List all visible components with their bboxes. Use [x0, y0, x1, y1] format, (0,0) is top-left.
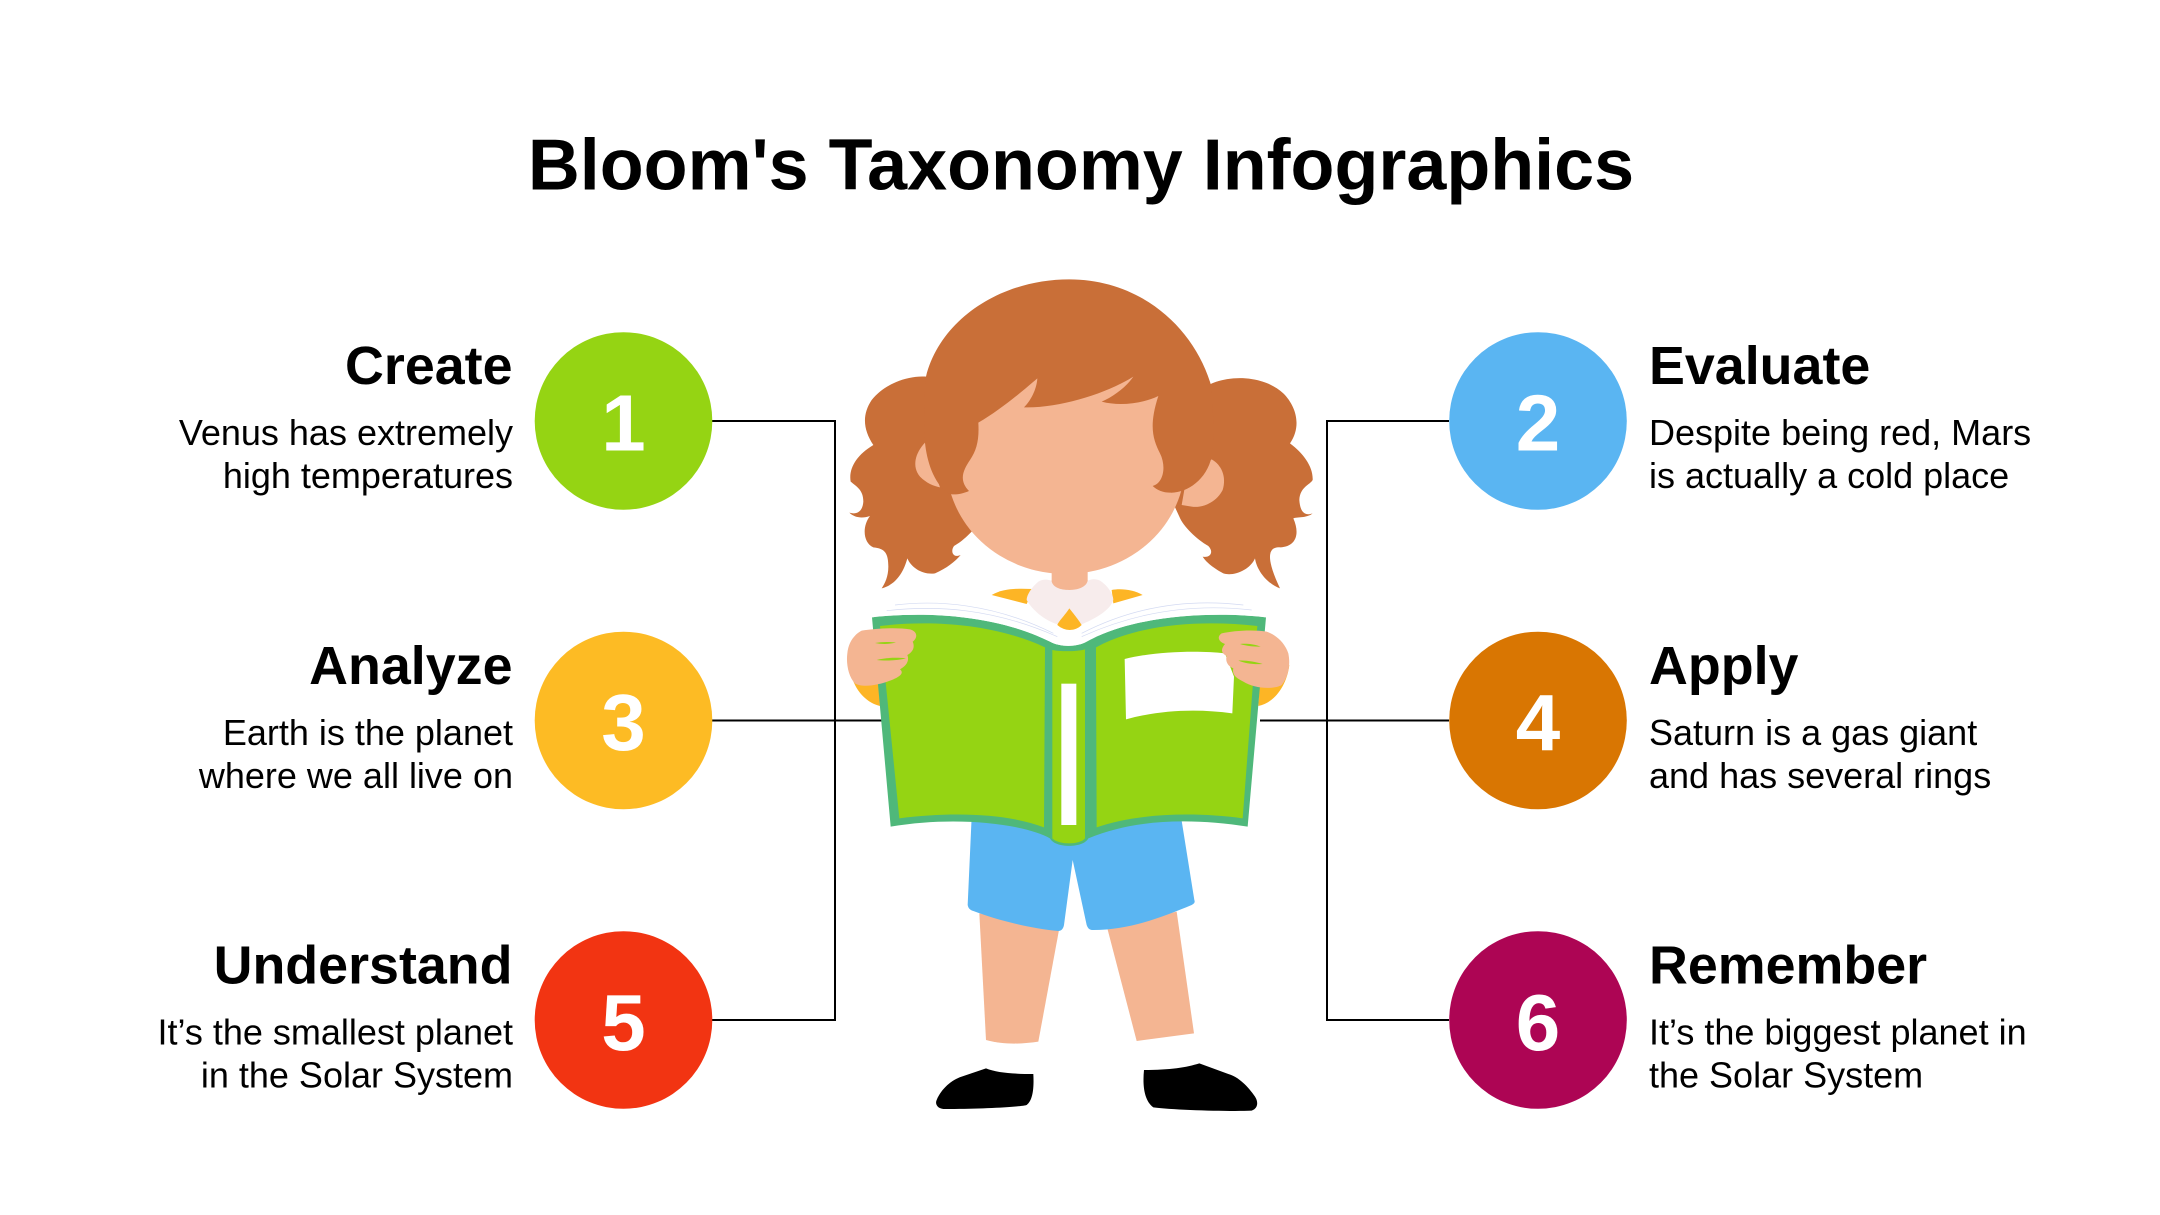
item 3: Analyze: 3: [601, 678, 646, 767]
number circle 5: [535, 931, 712, 1109]
description: Evaluate: Despite being red, Mars: [1649, 412, 2031, 453]
item 2: Evaluate: 2: [1516, 378, 1560, 468]
connector lines: left bracket: [712, 421, 890, 1020]
description: Understand: in the Solar System: [201, 1054, 513, 1096]
item 5: Understand: 5: [601, 978, 646, 1067]
item 5: Understand: [157, 931, 712, 1109]
item 1: Create: 1: [601, 378, 646, 468]
heading: Create: Create: [345, 336, 512, 396]
item 3: Analyze: [198, 632, 712, 809]
description: Analyze: Earth is the planet: [223, 712, 513, 753]
legs, shorts and shoes: [936, 817, 1257, 1111]
number circle 3: [535, 632, 712, 809]
description: Understand: It’s the smallest planet: [157, 1012, 513, 1052]
description: Apply: Saturn is a gas giant: [1649, 712, 1977, 753]
number circle 4: [1449, 632, 1627, 809]
item 2: Evaluate: [1449, 332, 2031, 510]
description: Create: high temperatures: [223, 455, 513, 496]
head and hair: [849, 279, 1313, 590]
heading: Analyze: Analyze: [309, 636, 512, 696]
illustration: child reading a book: [847, 279, 1313, 1111]
number circle 1: [535, 332, 712, 510]
description: Analyze: where we all live on: [198, 755, 513, 796]
description: Remember: It’s the biggest planet in: [1649, 1012, 2027, 1052]
description: Evaluate: is actually a cold place: [1649, 455, 2009, 496]
item 4: Apply: [1449, 632, 1991, 809]
shirt, collar, open book and hands: [847, 579, 1289, 846]
connector lines: right bracket: [1260, 421, 1449, 1020]
heading: Remember: Remember: [1649, 936, 1927, 996]
heading: Apply: Apply: [1649, 636, 1799, 696]
item 4: Apply: 4: [1516, 678, 1561, 767]
description: Create: Venus has extremely: [179, 412, 513, 453]
title: Bloom's Taxonomy Infographics: [528, 126, 1634, 206]
description: Remember: the Solar System: [1649, 1054, 1923, 1096]
number circle 2: [1449, 332, 1627, 510]
number circle 6: [1449, 931, 1627, 1109]
heading: Evaluate: Evaluate: [1649, 336, 1870, 396]
item 6: Remember: 6: [1516, 978, 1560, 1067]
item 6: Remember: [1449, 931, 2027, 1109]
heading: Understand: Understand: [214, 936, 512, 996]
item 1: Create: [179, 332, 712, 510]
description: Apply: and has several rings: [1649, 755, 1991, 796]
